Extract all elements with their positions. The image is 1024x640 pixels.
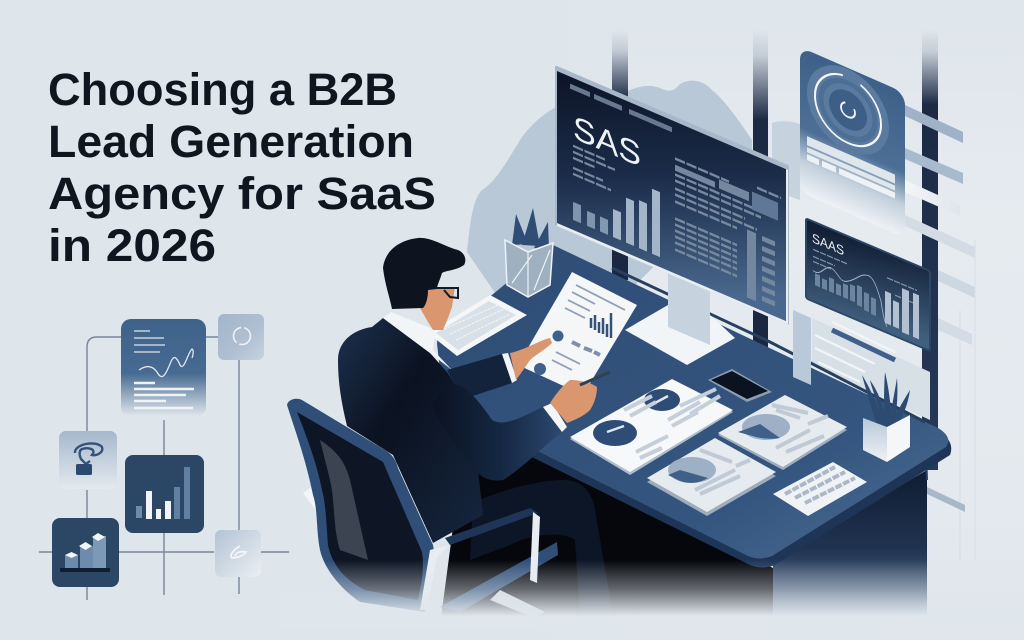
bottom fade <box>280 560 1024 626</box>
plant pot <box>863 415 910 462</box>
near hand <box>550 380 597 423</box>
desk vertical device <box>793 310 811 385</box>
document with pie chart, right <box>718 395 847 470</box>
armrest and seat <box>420 508 558 618</box>
shirt collar <box>383 312 452 370</box>
window backdrop <box>467 30 1024 640</box>
title <box>48 64 436 271</box>
card: swirl icon <box>215 530 261 577</box>
head <box>420 287 455 330</box>
monitor stand <box>625 270 735 365</box>
desk pedestal and under-desk shadow <box>440 400 965 625</box>
far cuff <box>502 353 517 383</box>
near arm <box>432 384 562 481</box>
window frames <box>612 30 938 470</box>
plant <box>862 372 910 462</box>
small floating monitor: SAAS <box>812 230 844 258</box>
legs <box>470 480 613 615</box>
glasses <box>437 288 458 298</box>
hair <box>383 238 465 309</box>
small floating monitor <box>805 217 931 352</box>
pen <box>580 372 610 385</box>
title: Lead Generation <box>48 116 414 167</box>
monitor text rows <box>573 109 781 295</box>
man <box>338 238 637 543</box>
plant leaves <box>862 372 910 428</box>
card: headset icon <box>59 431 117 489</box>
pen cup <box>505 208 553 297</box>
card: isometric bars icon <box>52 518 119 587</box>
silhouette behind the monitor <box>467 81 752 300</box>
torso <box>338 318 483 543</box>
held report <box>518 272 637 395</box>
office chair <box>287 399 434 612</box>
document with pie chart, lower <box>647 438 776 516</box>
card: document with wave chart <box>121 319 206 417</box>
title: Agency for SaaS <box>48 168 436 219</box>
monitor header <box>570 84 672 132</box>
keyboard <box>428 295 527 356</box>
far arm <box>447 354 512 397</box>
document with circle charts <box>570 379 733 475</box>
main monitor <box>555 65 789 325</box>
top floating card with radial gauge <box>800 47 905 238</box>
main monitor: SAS <box>573 109 641 175</box>
desk <box>437 245 951 568</box>
floating bars at right <box>905 105 975 560</box>
flow diagram of icon cards <box>39 314 289 600</box>
card: bar chart icon <box>125 455 204 533</box>
title: Choosing a B2B <box>48 64 397 115</box>
monitor table blocks <box>675 159 778 311</box>
window note papers <box>812 318 930 420</box>
radial gauge <box>807 51 889 169</box>
title: in 2026 <box>48 220 216 271</box>
near cuff <box>543 403 567 432</box>
far hand <box>510 338 552 380</box>
monitor bar chart <box>573 155 660 257</box>
phone <box>708 369 772 402</box>
card: circle icon <box>218 314 264 360</box>
small table sheet <box>773 462 867 516</box>
